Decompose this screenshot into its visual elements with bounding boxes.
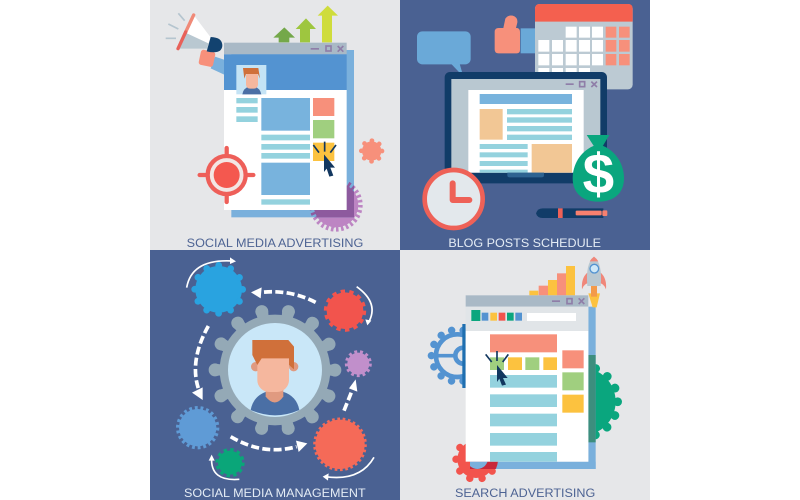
avatar — [236, 65, 266, 94]
caption: SOCIAL MEDIA MANAGEMENT — [184, 486, 366, 500]
icon: pen — [536, 208, 607, 218]
caption: SEARCH ADVERTISING — [455, 486, 595, 500]
bar chart — [529, 266, 575, 295]
icon: green gear — [588, 364, 622, 440]
panel: search advertising — [400, 250, 650, 500]
gears ring — [178, 265, 370, 476]
icon: red gear — [456, 439, 496, 479]
dashed arrows — [192, 287, 357, 452]
central gear with person — [215, 310, 335, 430]
caption: BLOG POSTS SCHEDULE — [448, 236, 601, 250]
icon: growth arrows — [273, 6, 338, 42]
icon: purple gear — [312, 181, 360, 229]
icon: salmon gear — [361, 141, 382, 161]
laptop — [445, 72, 607, 183]
icon: money bag: $ — [583, 144, 614, 207]
browser window — [224, 42, 354, 218]
icon: calendar — [535, 4, 633, 89]
icon: clock — [425, 170, 483, 228]
browser window — [466, 295, 596, 469]
panel: social media advertising — [150, 0, 400, 250]
icon: cursor click — [486, 351, 508, 386]
panel: blog posts schedule — [400, 0, 650, 250]
caption: SOCIAL MEDIA ADVERTISING — [187, 236, 363, 250]
curved arrows — [187, 257, 374, 481]
icon: money bag — [573, 135, 624, 207]
icon: rocket — [582, 257, 606, 307]
panel: social media management — [150, 250, 400, 500]
person — [251, 340, 299, 415]
icon: megaphone — [166, 13, 225, 75]
icon: target — [200, 148, 253, 202]
icon: thumbs up — [495, 15, 535, 53]
icon: cursor click — [313, 142, 336, 177]
icon: speech bubble — [417, 31, 471, 77]
icon: blue gear — [428, 324, 466, 388]
